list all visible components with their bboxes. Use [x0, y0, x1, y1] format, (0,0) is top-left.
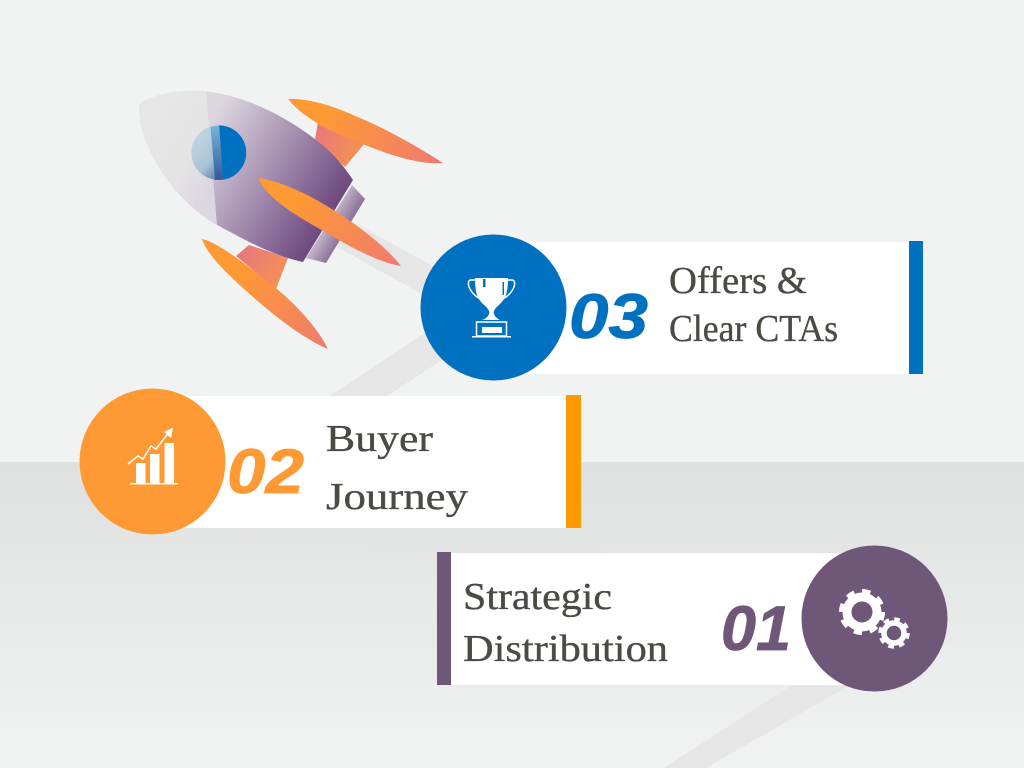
- middle fin: [258, 178, 401, 266]
- number 01: 01: [721, 594, 791, 664]
- heading: offers and clear CTAs: Offers &: [669, 260, 807, 302]
- number 03: 03: [569, 282, 648, 352]
- rocket body: [139, 91, 353, 262]
- heading: strategic distribution: Strategic: [463, 576, 612, 618]
- rocket nose: [139, 91, 217, 225]
- icon: gears: [842, 592, 908, 646]
- accent bar: [566, 395, 581, 528]
- card: [150, 396, 568, 528]
- icon: growth chart: [128, 428, 178, 484]
- rocket: [139, 91, 443, 349]
- icon: trophy: [468, 278, 515, 338]
- rocket exhaust streaks: [240, 222, 850, 768]
- accent bar: [909, 241, 923, 374]
- porthole: [191, 125, 246, 180]
- upper pylon: [315, 122, 365, 167]
- panel 02: buyer journey: [80, 388, 581, 534]
- heading: strategic distribution: Distribution: [463, 628, 668, 670]
- badge: [802, 546, 948, 692]
- heading: offers and clear CTAs: [669, 260, 838, 350]
- background floor: [0, 462, 1024, 768]
- engine: [306, 185, 365, 263]
- heading: offers and clear CTAs: Clear CTAs: [669, 308, 838, 350]
- number 02: 02: [227, 437, 304, 507]
- heading: buyer journey: [326, 418, 468, 518]
- heading: strategic distribution: [463, 576, 668, 670]
- badge: [420, 234, 566, 380]
- upper fin: [288, 99, 443, 163]
- card: [450, 553, 874, 685]
- background wall: [0, 0, 1024, 462]
- heading: buyer journey: Journey: [326, 476, 468, 518]
- panel 01: strategic distribution: [437, 546, 948, 692]
- badge: [80, 388, 226, 534]
- heading: buyer journey: Buyer: [326, 418, 433, 460]
- accent bar: [437, 552, 451, 685]
- card: [490, 242, 910, 374]
- lower fin: [202, 239, 328, 349]
- panel 03: offers and clear CTAs: [420, 234, 923, 380]
- lower pylon: [236, 245, 288, 289]
